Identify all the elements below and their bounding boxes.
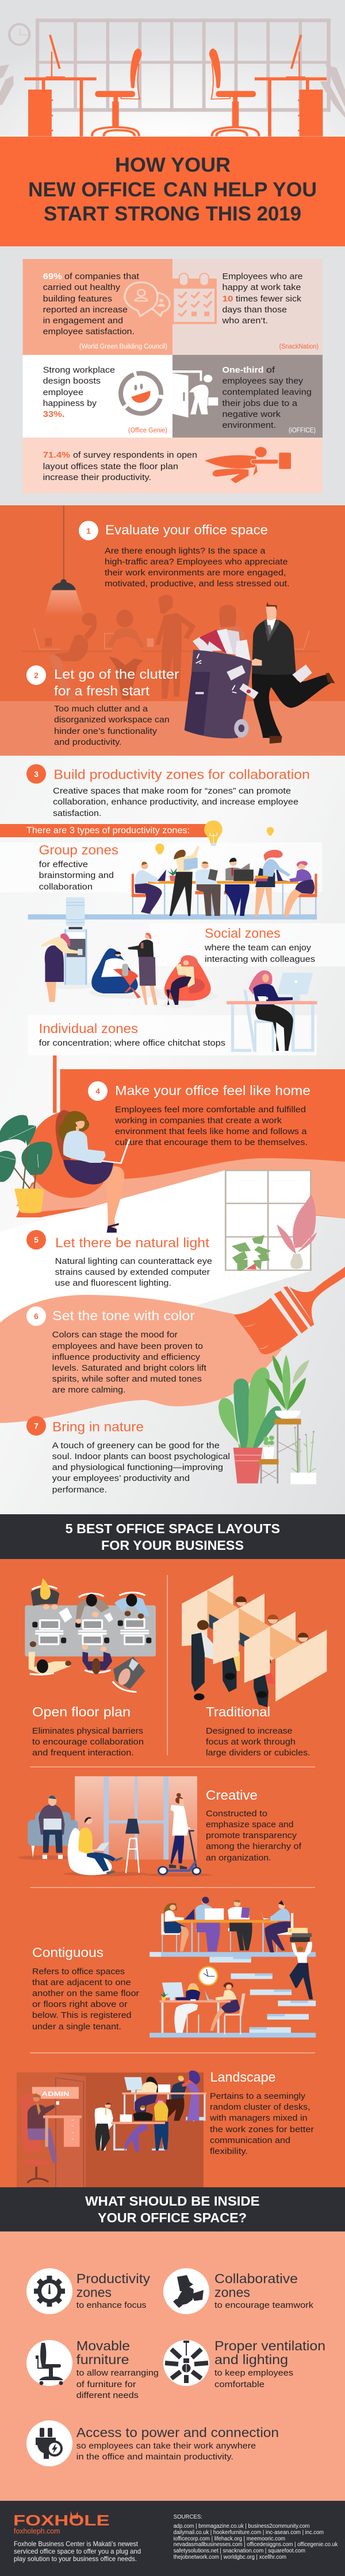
section 5: let there be natural light: strains caused by extended computer [55,1267,210,1277]
hero title panel: HOW YOUR [115,154,231,176]
panel: social zones white backing [150,923,345,966]
stat panel: 71.4% of survey respondents: increase their productivity. [43,473,151,482]
group zones text: Group zones [39,842,118,857]
stat panel: 71.4% of survey respondents: layout offices state the floor plan [43,462,178,471]
panel: individual zones: for concentration; where office chitchat stops [39,1038,225,1048]
illustration: woman on bean bag with laptop and plant [0,1110,129,1233]
upper floor and stairs [150,1952,316,2037]
icon: person leaving through door [172,370,218,417]
item: access to power and connection: in the office and maintain productivity. [76,2452,233,2462]
section 1: evaluate your office space: motivated, productive, and less stressed out. [105,579,290,589]
panel: group zones white backing [0,842,322,892]
shadows [45,981,218,1008]
hanging lamp [44,505,85,616]
stand [275,1419,301,1425]
section 4 text: make your office feel like home: 4 [95,1086,100,1096]
lamp [125,1819,140,1873]
illustration: water cooler and bean bags [41,898,218,1008]
illustration: contiguous floors and stairs [150,1897,316,2037]
section 7: bring in nature: and physiological functioning—improving [52,1463,223,1472]
section 5: let there be natural light: 5 [34,1235,39,1244]
front panels [213,1608,239,1664]
room background [17,2072,204,2197]
stat panel: 33% happiness [23,355,172,438]
social zones text [204,926,315,964]
admin sign [32,2087,79,2099]
section 2: let go of the clutter: Too much clutter and a [54,704,148,714]
item: collaborative zones: zones [214,2285,250,2300]
hero title panel: NEW OFFICE [28,179,156,201]
logo: Foxhole: FOXHOLE [13,2512,110,2529]
illustration: open floor plan top view [25,1578,156,1692]
stat panel: 10 times fewer sick days: times fewer sick [236,294,302,304]
group zones text [39,842,118,892]
cactus [218,1398,242,1448]
manager in chair [20,2093,59,2183]
stats section background [0,246,345,505]
person 5 and books [254,850,290,917]
desk [25,1606,156,1657]
chairs [30,1586,145,1692]
hero title panel: CAN HELP YOU [163,179,317,201]
section 7: bring in nature: your employees’ productivity and [52,1473,190,1483]
section 1: evaluate your office space [79,521,290,589]
contiguous text: Refers to office spaces [32,1967,125,1977]
landscape text [209,2070,314,2156]
open floor plan text: and frequent interaction. [32,1748,134,1758]
item: movable furniture: of furniture for [76,2380,136,2389]
section 5: let there be natural light: use and fluorescent lighting. [55,1278,171,1288]
about text: serviced office space to offer you a plug and [14,2547,141,2555]
hand [249,659,262,666]
table [164,884,165,915]
icon: gear with gauge [34,2276,65,2307]
light bulbs [155,821,274,854]
stat panel: 69% of companies: carried out healthy [43,283,121,292]
section 4 text: make your office feel like home: working in companies that create a work [114,1116,282,1125]
stat panel: 10 times fewer sick days: Employees who are [222,272,302,281]
dark band heading: 5 best layouts: FOR YOUR BUSINESS [101,1538,244,1553]
creative text: emphasize space and [206,1820,293,1829]
heads [235,1596,309,1642]
section 6: set the tone with color: spirits, while softer and muted tones [52,1374,202,1384]
wall clock [9,24,29,45]
icon: calendar with check marks [172,273,217,324]
person 6 [284,861,315,916]
right desk and chair [209,34,327,137]
hero title panel: START STRONG THIS 2019 [44,203,301,225]
section 2 lighter band [0,701,345,756]
icon: hands clasped [173,2275,204,2308]
stat panel: 69% of companies [23,259,172,355]
sources: dailymail.co.uk | hookerfurniture.com | inc-asean.com | inc.com [174,2529,324,2536]
section 2: let go of the clutter: for a fresh start [54,683,150,698]
stat panel: 71.4% of survey respondents: of survey respondents in open [73,450,197,460]
section 3: build productivity zones [26,764,310,818]
sources: SOURCES: [174,2514,202,2520]
illustration: potted plants on stands [218,1355,316,1484]
bin [185,650,252,738]
social zones text: where the team can enjoy [204,943,312,953]
item: movable furniture: different needs [76,2391,139,2400]
monitors and seated workers [191,1614,275,1707]
item: collaborative zones: to encourage teamwork [214,2300,314,2310]
section 4 orange panel and salmon wave [16,1069,345,1219]
landscape text: random cluster of desks, [210,2102,310,2112]
creative text: an organization. [206,1853,271,1863]
stat panel: 69% of companies: of companies that [64,272,140,281]
section 7: bring in nature: Bring in nature [52,1419,144,1434]
illustration: creative layout [18,1776,212,1877]
legs [252,674,332,738]
section 1: evaluate your office space: high-traffic area? Employees who appreciate [105,557,288,567]
section 5: let there be natural light: Let there be natural light [55,1235,210,1250]
item: movable furniture [26,2338,159,2400]
illustration: man pushing overflowing recycling bin [185,602,335,744]
woman standing with jacket [128,933,158,1005]
creative text [206,1788,302,1863]
traditional text: large dividers or cubicles. [206,1748,310,1758]
open floor plan text: Open floor plan [32,1704,131,1719]
section 4 text: make your office feel like home: Make your office feel like home [115,1083,310,1098]
floor [28,914,317,919]
traditional text: Traditional [206,1704,270,1719]
section 7: bring in nature: soul. Indoor plants can boost psychological [52,1452,230,1461]
stat panel: one-third of employees: environment. [222,420,276,430]
stat panel: 69% of companies: in engagement and [43,316,123,326]
pothos plant [232,1235,271,1271]
landscape text: flexibility. [210,2146,248,2156]
section 3: build productivity zones: Build productivity zones for collaboration [53,767,310,782]
left desk and chair [24,34,142,137]
bean bag person [68,1817,123,1875]
white diagonal light area [0,1170,311,1326]
section 6: set the tone with color: levels. Saturated and bright colors lift [52,1363,207,1373]
stat panel: one-third of employees: contemplated leaving [222,387,312,397]
hair [59,1111,89,1144]
item: productivity zones [26,2268,151,2314]
section 2: let go of the clutter: and productivity. [54,737,122,747]
stat panel: 33% happiness: happiness by [43,399,97,408]
section 1: evaluate your office space: Evaluate your office space [105,523,268,537]
section 4 text: make your office feel like home: Employees feel more comfortable and fulfilled [115,1105,306,1115]
section 1 orange background [0,505,345,701]
stat panel: 69% of companies: reported an increase [43,305,128,315]
wall clock [199,1967,217,1985]
stat panel: 69% of companies: employee satisfaction. [43,327,135,336]
woman at cooler [41,934,79,1002]
item: access to power and connection: so employees can take their work anywhere [76,2441,256,2451]
contiguous text: Contiguous [32,1945,103,1960]
papers in bin [193,629,251,660]
traditional text: Designed to increase [206,1726,293,1736]
stat panel: 10 times fewer sick days: happy at work take [222,283,301,292]
sources: adp.com | bmmagazine.co.uk | business2community.com [174,2523,309,2529]
section 2: let go of the clutter: disorganized workspace can [54,715,170,725]
section 6: set the tone with color: are more calming. [52,1385,125,1395]
about text: Foxhole Business Center is Makati’s newest [14,2540,139,2548]
layouts section background [0,1559,345,2187]
group zones text: collaboration [39,882,93,892]
suit jacket [252,619,296,675]
upper people [164,1897,290,1952]
bean bag [28,1111,103,1198]
small clover pot [263,1447,274,1459]
item: proper ventilation and lighting [163,2338,325,2389]
open floor plan text: Eliminates physical barriers [32,1726,143,1736]
section 1: evaluate your office space: 1 [86,526,91,535]
dark band heading: what should be inside: WHAT SHOULD BE INSIDE [85,2194,260,2208]
section 2: let go of the clutter [26,666,179,747]
traditional text: focus at work through [206,1737,296,1747]
stat panel: 71.4% of survey respondents: 71.4% [43,450,70,460]
stat panel: one-third of employees: negative work [222,409,281,419]
red pot [233,1448,263,1483]
hero title panel [0,137,345,246]
section 2: let go of the clutter: Let go of the clutter [54,667,179,682]
envelopes [227,665,246,680]
icon: ceiling fan [165,2341,208,2383]
item: proper ventilation and lighting: and lighting [214,2352,288,2367]
stat panel: 33% happiness: (Office Genie) [128,427,167,434]
item: productivity zones: zones [76,2285,112,2300]
admin desk [43,2115,82,2147]
icon: speech bubbles with people [125,283,170,316]
contiguous text: below. This is registered [32,2010,131,2020]
stat panel: 69% of companies: (World Green Building Council) [79,343,167,350]
pink plant [277,1194,317,1254]
legs [107,1166,124,1228]
sources: thejobnetwork.com | worldgbc.org | xcellhr.com [174,2554,286,2560]
upper table [162,1923,277,1952]
open floor plan text: to encourage collaboration [32,1737,144,1747]
lower table [162,2002,241,2035]
right desks [113,2094,205,2150]
about text: play solution to your business office needs. [14,2555,137,2563]
landscape text: Pertains to a seemingly [210,2091,306,2101]
section 4 text: make your office feel like home: culture that encourage them to be themselves. [115,1138,308,1147]
item: movable furniture: to allow rearranging [76,2368,159,2378]
icon: smiley [116,369,166,418]
laptop [102,1139,129,1163]
hero illustration: office with desks and chairs [0,0,345,137]
stat panel: 69% of companies: 69% [43,272,62,281]
section 6: set the tone with color: 6 [34,1312,39,1321]
person 3 [195,861,221,916]
dividers [30,1575,315,2053]
side panels [208,1590,239,1623]
section 7: bring in nature [26,1416,230,1495]
item: access to power and connection [26,2420,279,2466]
section 3: build productivity zones: collaboration, enhance productivity, and increase employee [53,797,298,807]
section 5: let there be natural light: Natural lighting can counterattack eye [55,1256,212,1266]
dark band heading: 5 best layouts [0,1514,345,1559]
social zones text: interacting with colleagues [205,954,315,964]
stat panel: 10 times fewer sick days: who aren‘t. [221,316,268,326]
sweater [63,1131,106,1163]
illustration: traditional cubicles [182,1575,327,1707]
section 1: evaluate your office space: their work environments are more engaged, [105,568,286,578]
window panel [75,1776,197,1859]
gray lower background [0,756,345,1514]
illustration: window with plants [225,1170,317,1271]
dark band heading: what should be inside [0,2187,345,2231]
item: movable furniture: Movable [76,2338,130,2353]
stat panel: 33% happiness: Strong workplace [43,365,115,375]
contiguous text: under a single tenant. [32,2022,121,2032]
stat panel: one-third of employees: their jobs due to a [222,399,298,408]
connector bar [53,1055,56,1113]
section 4 text: make your office feel like home [88,1081,310,1147]
standing man and lower desk [95,2102,113,2150]
back panels [182,1590,208,1646]
landscape text: communication and [210,2136,290,2145]
stat panel: 10 times fewer sick days: (SnackNation) [279,343,319,350]
stat panel: 69% of companies: building features [43,294,112,304]
illustration: group meeting around table with light bulbs [28,821,317,919]
section 7: bring in nature: 7 [34,1421,39,1430]
creative text: among the hierarchy of [206,1842,302,1851]
mice [32,1620,151,1643]
footer: foxholeph.com [14,2527,60,2535]
section 5: let there be natural light [26,1230,212,1288]
bottom people [29,1652,70,1674]
stat panel: 10 times fewer sick days: 10 [222,294,233,304]
item: proper ventilation and lighting: to keep employees [214,2368,293,2378]
section 6: set the tone with color: employees and have been proven to [52,1341,203,1351]
person 2 standing [170,846,200,916]
stat panel: one-third of employees: employees say they [222,376,304,386]
stat panel: 10 times fewer sick days [172,259,323,355]
top people [31,1588,59,1606]
dark band heading: 5 best layouts: 5 BEST OFFICE SPACE LAYOUTS [66,1521,280,1536]
group zones text: brainstorming and [39,871,114,880]
salmon checklist background [0,2231,345,2501]
footer [0,2501,345,2576]
sources: nevadasmallbusinesses.com | officedesiggns.com | officegenie.co.uk [174,2542,338,2548]
water cooler [64,898,87,985]
creative text: Constructed to [206,1809,267,1819]
item: movable furniture: furniture [76,2352,129,2367]
skirt [63,1160,113,1185]
contiguous text [32,1945,139,2032]
about text [14,2540,141,2563]
woman on scooter [159,1793,201,1874]
section 2: let go of the clutter: hinder one’s functionality [54,726,158,736]
stat panel: one-third of employees: of [266,365,275,375]
stat panel: one-third of employees: (iOFFICE) [289,427,316,434]
section 6: set the tone with color: Set the tone with color [52,1308,195,1323]
section 3: build productivity zones: Creative spaces that make room for “zones” can promote [53,786,291,796]
item: collaborative zones: Collaborative [214,2271,298,2286]
section 7: bring in nature: A touch of greenery can be good for the [52,1441,220,1451]
window frame [36,18,331,112]
section 6: set the tone with color: influence productivity and efficiency [52,1352,201,1362]
person 1 [135,862,166,914]
contiguous text: or floors right above or [32,1999,128,2009]
man carrying boxes [288,1928,313,1999]
section 6: set the tone with color [26,1306,207,1395]
item: proper ventilation and lighting: Proper ventilation [214,2338,325,2353]
shadows [18,1855,212,1877]
armchair person [28,1796,78,1859]
stat panel: 71.4% of survey respondents [23,438,322,493]
keyboards [35,1607,149,1645]
icon: flying superhero with briefcase [205,447,291,484]
illustration: landscape office with admin room [17,2071,206,2197]
icon: paint brush [233,1267,345,1355]
background silhouettes of coworkers at a table [22,595,320,699]
section 3: build productivity zones: 3 [34,769,39,779]
panel: individual zones: Individual zones [39,1021,138,1036]
side plants [0,64,345,118]
plant [0,1115,52,1182]
stat panel: one-third of employees: One-third [222,365,263,375]
landscape text: Landscape [210,2070,276,2084]
landscape text: with managers mixed in [209,2113,308,2123]
contiguous text: that are adjacent to one [32,1978,131,1987]
traditional text [206,1704,310,1758]
section 7: bring in nature: performance. [52,1485,107,1495]
open floor plan text [32,1704,144,1758]
blue bean bag [91,949,141,998]
group zones text: for effective [39,860,88,869]
sources: iofficecorp.com | lifehack.org | meemooric.com [174,2536,285,2542]
red bean bag [164,955,211,1005]
social zones text: Social zones [205,926,281,941]
section 6: set the tone with color: Colors can stage the mood for [52,1330,178,1340]
item: access to power and connection: Access to power and connection [76,2425,279,2440]
banner: 3 types of productivity zones: There are 3 types of productivity zones: [26,826,190,836]
banner: 3 types of productivity zones [0,824,209,837]
section 4 text: make your office feel like home: environment that feels like home and follows a [115,1127,307,1136]
chairs [132,894,316,915]
stat panel: 33% happiness: employee [43,388,83,397]
admin sign: ADMIN [41,2090,70,2098]
dark band heading: what should be inside: YOUR OFFICE SPACE? [98,2210,247,2225]
illustration: individual zone woman at computer [227,970,317,1052]
creative text: Creative [206,1788,258,1803]
landscape text: the work zones for better [210,2125,314,2134]
head [266,607,277,620]
panel: individual zones [28,1015,317,1055]
section 2: let go of the clutter: 2 [34,671,39,680]
stat panel: 33% happiness: 33%. [43,409,65,419]
creative text: promote transparency [206,1831,297,1840]
item: proper ventilation and lighting: comfortable [214,2380,264,2389]
item: productivity zones: Productivity [76,2271,151,2286]
lavender [292,1428,316,1473]
section 6 paint stroke background [0,1295,282,1423]
item: productivity zones: to enhance focus [76,2300,146,2310]
plant [167,868,179,881]
item: collaborative zones [163,2268,314,2314]
stat panel: 10 times fewer sick days: days than those [222,305,287,315]
icon: office chair [36,2343,63,2385]
stat panel: 33% happiness: design boosts [43,376,101,386]
section 1: evaluate your office space: Are there enough lights? Is the space a [105,546,266,556]
sources [174,2514,338,2560]
person 4 [225,858,254,916]
leafy plant [265,1355,306,1411]
section 3: build productivity zones: satisfaction. [53,809,101,818]
sources: safetysolutions.net | snacknation.com | squarefoot.com [174,2548,305,2554]
icon: plug with bolt [36,2428,62,2459]
stat panel: one-third of employees [172,355,323,438]
contiguous text: another on the same floor [32,1989,139,1998]
